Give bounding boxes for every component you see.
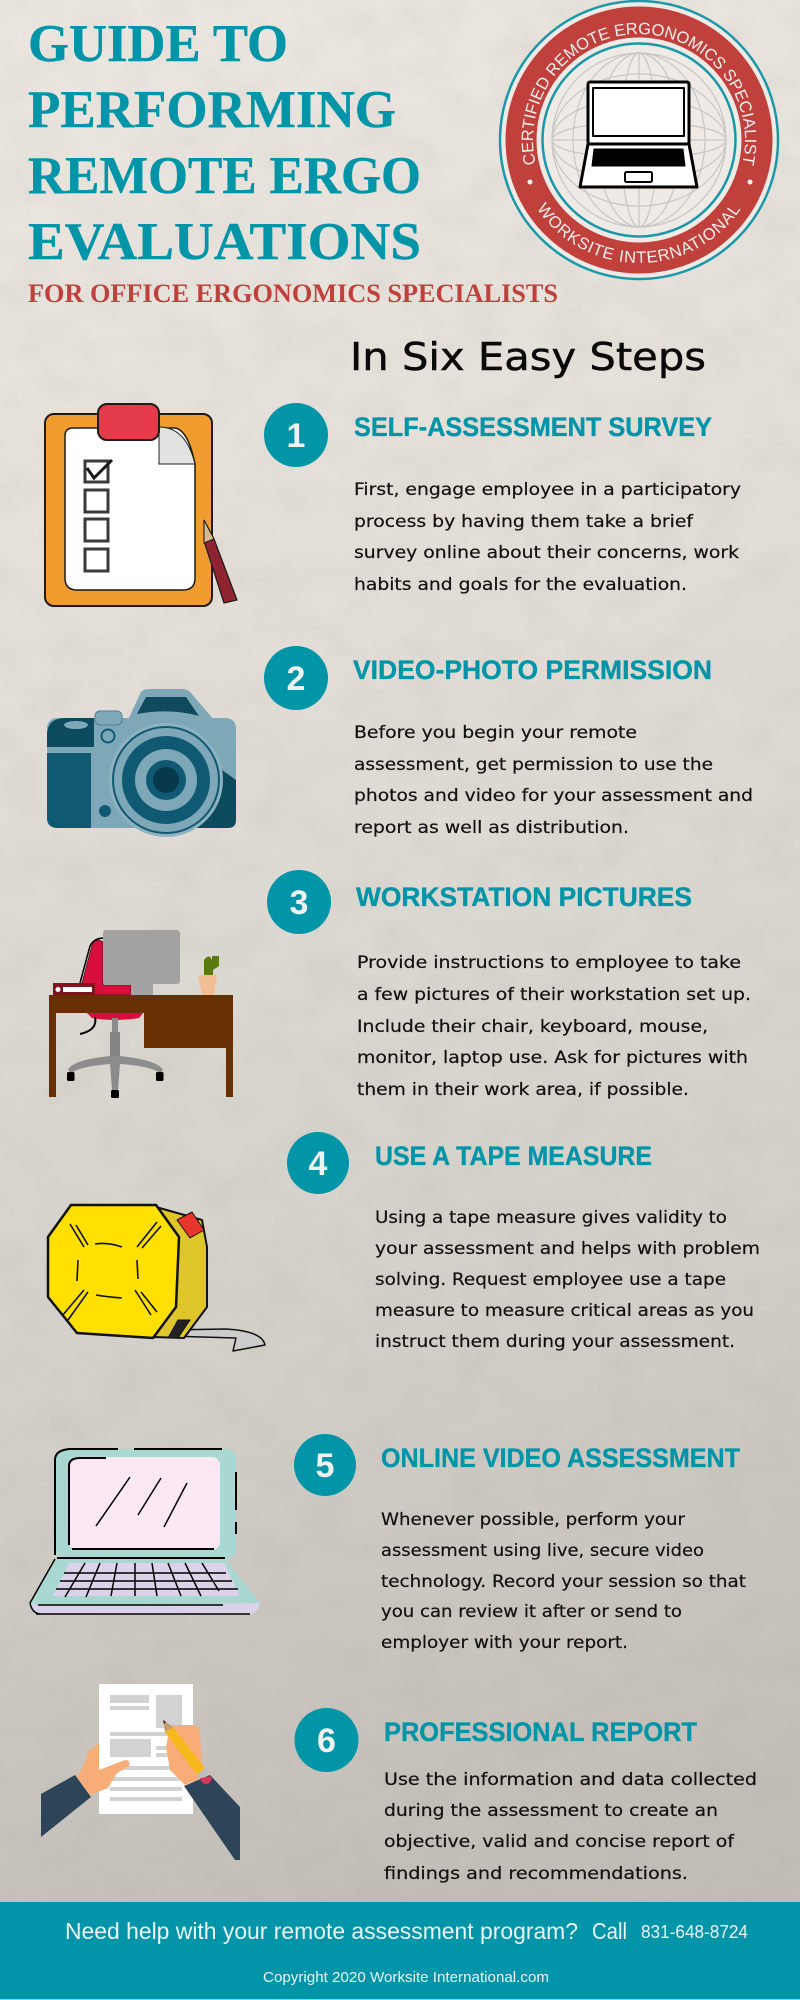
body text: habits and goals for the evaluation. (354, 575, 687, 594)
call to action: Need help with your remote assessment program? (65, 1918, 578, 1944)
body text: Before you begin your remote (354, 723, 637, 742)
body text: monitor, laptop use. Ask for pictures with (357, 1048, 748, 1067)
badge ring text: CERTIFIED REMOTE ERGONOMICS SPECIALIST (522, 22, 756, 166)
step 3 panel (49, 870, 751, 1099)
number 4 (287, 1132, 349, 1194)
body text: assessment using live, secure video (381, 1541, 704, 1560)
body text: a few pictures of their workstation set up. (357, 985, 751, 1004)
number 1 (264, 403, 328, 467)
body text: assessment, get permission to use the (354, 755, 713, 774)
body text: findings and recommendations. (384, 1864, 688, 1883)
title: PERFORMING (28, 81, 396, 139)
icon: hands writing report (41, 1684, 240, 1860)
phone number: 831-648-8724 (641, 1922, 748, 1942)
heading: PROFESSIONAL REPORT (384, 1717, 697, 1747)
number 1: 1 (287, 417, 305, 455)
body text: Provide instructions to employee to take (357, 953, 741, 972)
body text: process by having them take a brief (354, 512, 694, 531)
badge ring text (522, 22, 756, 263)
body text: solving. Request employee use a tape (375, 1270, 726, 1289)
body text: First, engage employee in a participatory (354, 480, 741, 499)
title: EVALUATIONS (28, 213, 421, 271)
icon: camera (47, 689, 236, 837)
body text (357, 953, 751, 1099)
number 5 (294, 1434, 356, 1496)
title: GUIDE TO (28, 15, 288, 73)
body text: objective, valid and concise report of (384, 1832, 735, 1851)
body text: during the assessment to create an (384, 1801, 718, 1820)
body text: Include their chair, keyboard, mouse, (357, 1017, 708, 1036)
title (28, 15, 421, 271)
body text: you can review it after or send to (381, 1602, 682, 1621)
body text: Use the information and data collected (384, 1770, 757, 1789)
number 4: 4 (309, 1145, 328, 1183)
number 3: 3 (290, 884, 308, 922)
step 4 panel (48, 1132, 760, 1351)
step 1 panel (45, 403, 741, 606)
step 6 panel (41, 1684, 757, 1883)
heading: ONLINE VIDEO ASSESSMENT (381, 1443, 740, 1473)
body text: photos and video for your assessment and (354, 786, 753, 805)
icon: desk with chair and monitor (49, 930, 233, 1098)
body text: your assessment and helps with problem (375, 1239, 760, 1258)
heading: WORKSTATION PICTURES (356, 882, 692, 912)
body text: them in their work area, if possible. (357, 1080, 689, 1099)
icon: tape measure (48, 1205, 265, 1351)
body text (354, 723, 753, 837)
body text: technology. Record your session so that (381, 1572, 747, 1591)
body text: employer with your report. (381, 1633, 628, 1652)
number 5: 5 (316, 1447, 334, 1485)
heading: SELF-ASSESSMENT SURVEY (354, 412, 712, 442)
heading: VIDEO-PHOTO PERMISSION (353, 655, 712, 685)
globe lines (551, 52, 727, 228)
body text (354, 480, 741, 594)
body text (375, 1208, 760, 1351)
number 2 (264, 646, 328, 710)
certification badge (498, 0, 780, 280)
body text: Whenever possible, perform your (381, 1510, 685, 1529)
number 3 (267, 870, 331, 934)
body text: Using a tape measure gives validity to (375, 1208, 727, 1227)
number 2: 2 (287, 660, 305, 698)
badge laptop (580, 82, 697, 187)
step 2 panel (47, 646, 753, 837)
footer band (0, 1902, 800, 1999)
number 6 (294, 1708, 358, 1772)
number 6: 6 (317, 1722, 336, 1760)
badge ring text: WORKSITE INTERNATIONAL (538, 202, 740, 263)
body text (381, 1510, 747, 1652)
copyright: Copyright 2020 Worksite International.com (263, 1969, 549, 1986)
body text (384, 1770, 757, 1883)
section heading: In Six Easy Steps (350, 335, 706, 380)
body text: instruct them during your assessment. (375, 1332, 735, 1351)
body text: report as well as distribution. (354, 818, 629, 837)
call label: Call (592, 1918, 627, 1944)
heading: USE A TAPE MEASURE (375, 1141, 652, 1171)
subtitle: FOR OFFICE ERGONOMICS SPECIALISTS (28, 279, 558, 308)
step 5 panel (30, 1434, 747, 1652)
title: REMOTE ERGO (28, 147, 421, 205)
icon: laptop (30, 1449, 260, 1614)
body text: measure to measure critical areas as you (375, 1301, 754, 1320)
body text: survey online about their concerns, work (354, 543, 739, 562)
icon: clipboard (45, 404, 237, 606)
